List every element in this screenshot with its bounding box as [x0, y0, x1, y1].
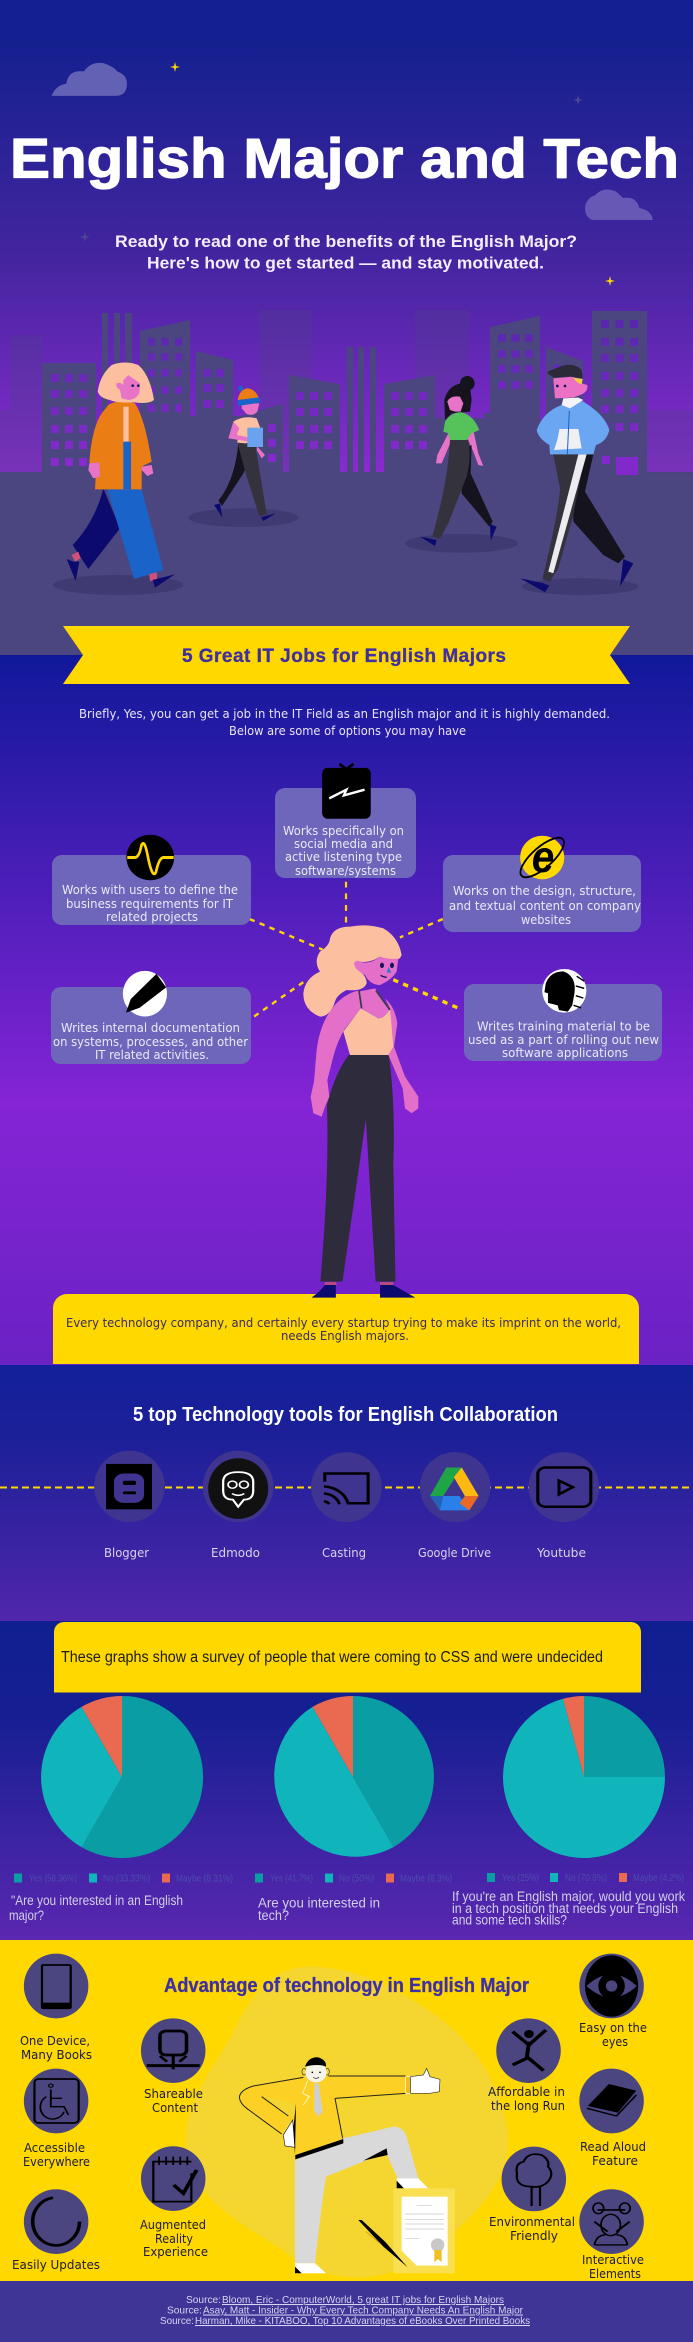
callout: English majors needed: needs English majors. [281, 1328, 409, 1343]
caption 3: in a tech position that needs your English [452, 1901, 678, 1916]
job card: documentation: IT related activities. [95, 1048, 209, 1062]
icon: tablet [24, 1954, 88, 2018]
icon: pulse [126, 835, 174, 880]
pie chart 1 [41, 1696, 203, 1858]
caption 1 [9, 1893, 183, 1923]
job card: business requirements: business requirements for IT [66, 897, 234, 911]
job card: social media [275, 788, 416, 878]
intro text [79, 707, 610, 738]
subtitle: Here's how to get started — and stay motivated. [147, 254, 544, 272]
legend 3: Yes (25%) [502, 1873, 539, 1884]
icon: tree [502, 2147, 566, 2211]
illustration: woman upper body [303, 925, 418, 1117]
icon: notepad [141, 2146, 205, 2211]
caption 1: major? [9, 1908, 44, 1923]
caption 1: "Are you interested in an English [11, 1893, 183, 1908]
banner: 5 great IT jobs: 5 Great IT Jobs for English Majors [182, 646, 506, 667]
job card: training material: Writes training material to be [477, 1020, 650, 1034]
legend 2: Yes (41.7%) [270, 1874, 313, 1884]
caption 2: tech? [258, 1908, 289, 1923]
cloud right [585, 190, 653, 220]
advantage labels [12, 2021, 647, 2281]
job card: documentation: on systems, processes, and other [53, 1035, 248, 1049]
illustration: shoes over callout [312, 1285, 415, 1298]
illustration: pen [358, 2220, 408, 2267]
illustration: woman trousers [320, 1055, 396, 1286]
panel: advantages of technology [0, 1940, 693, 2281]
job card: training material [464, 984, 662, 1061]
icon: update ring [24, 2189, 88, 2254]
caption 3: and some tech skills? [452, 1913, 567, 1928]
footer: sources: Source: [167, 2304, 202, 2316]
advantage labels: Experience [143, 2245, 208, 2259]
stars [80, 62, 615, 286]
footer: sources: Asay, Matt - Insider - Why Every Tech Company Needs An English Major [203, 2304, 523, 2316]
job card: social media: Works specifically on [283, 824, 404, 838]
icon: speaking head [542, 969, 586, 1013]
icon: pencil [123, 971, 167, 1016]
tool icon: casting [311, 1452, 382, 1522]
callout: survey intro: These graphs show a survey of people that were coming to CSS and were undecided [61, 1649, 603, 1666]
intro text: Briefly, Yes, you can get a job in the IT Field as an English major and it is highly demanded. [79, 707, 610, 721]
advantage labels: Everywhere [23, 2155, 90, 2169]
icon: interactive people [579, 2189, 644, 2254]
icon: eye [579, 1954, 644, 2018]
illustration: man with thumbs up [239, 2057, 440, 2273]
job card: business requirements: Works with users to define the [62, 883, 238, 897]
tool icon: youtube [529, 1452, 599, 1522]
icon: book [579, 2069, 644, 2133]
heading: Advantage of technology in English Major [164, 1975, 529, 1997]
title: English Major and Tech [10, 126, 679, 190]
job card: business requirements: related projects [106, 910, 198, 924]
advantage labels: the long Run [491, 2099, 565, 2113]
advantage labels: Environmental [489, 2215, 575, 2229]
panel: survey graphs [0, 1621, 693, 1941]
advantage labels: Shareable [144, 2087, 203, 2101]
advantage labels: Content [152, 2101, 198, 2115]
tool icon: edmodo [203, 1451, 274, 1522]
advantage labels: Easily Updates [12, 2258, 100, 2272]
person: woman in orange coat [53, 362, 183, 595]
legend 1 [14, 1874, 233, 1884]
tool labels: Youtube [536, 1546, 586, 1560]
job card: website content: websites [521, 913, 571, 927]
advantage labels: Augmented [140, 2218, 206, 2232]
caption 3 [452, 1889, 685, 1928]
cloud left [52, 63, 127, 96]
job card: social media: social media and [294, 837, 393, 851]
pie chart 3 [503, 1696, 665, 1858]
footer: sources: Harman, Mike - KITABOO, Top 10 Advantages of eBooks Over Printed Books [195, 2315, 530, 2327]
intro text: Below are some of options you may have [229, 724, 466, 738]
advantage labels: Elements [589, 2267, 641, 2281]
callout: English majors needed: Every technology company, and certainly every startup trying to make its imprint on the world, [66, 1315, 621, 1330]
icon: network [141, 2018, 205, 2083]
tool labels: Casting [322, 1546, 366, 1560]
pie chart 2 [274, 1696, 434, 1857]
footer: sources: Source: [186, 2294, 221, 2306]
advantage labels: Affordable in [488, 2085, 565, 2099]
legend 1: Maybe (8.31%) [176, 1874, 233, 1884]
illustration: certificate [393, 2188, 455, 2273]
job card: business requirements [52, 855, 251, 925]
job card: social media: software/systems [295, 864, 396, 878]
subtitle: Ready to read one of the benefits of the English Major? [115, 233, 577, 251]
advantage labels: One Device, [20, 2034, 90, 2048]
icon: internet explorer [515, 831, 569, 884]
panel: technology tools [0, 1365, 693, 1621]
job card: website content [443, 855, 641, 932]
icon: jumping person [496, 2018, 561, 2083]
legend 3 [487, 1873, 684, 1884]
advantage labels: Easy on the [579, 2021, 647, 2035]
panel: IT jobs section [0, 655, 693, 1365]
banner: 5 great IT jobs [63, 626, 630, 684]
caption 2: Are you interested in [258, 1896, 380, 1910]
legend 2 [255, 1874, 452, 1884]
callout: survey intro [54, 1622, 641, 1692]
blob background [186, 1967, 508, 2277]
advantage labels: Reality [155, 2232, 193, 2246]
legend 2: No (50%) [339, 1874, 374, 1884]
job card: training material: software applications [502, 1046, 628, 1060]
heading: 5 top Technology tools for English Collaboration [133, 1404, 558, 1426]
job card: website content: and textual content on company [449, 899, 641, 913]
icon: internet explorer: e [532, 832, 554, 882]
legend 2: Maybe (8.3%) [400, 1874, 452, 1884]
cityscape [0, 310, 693, 475]
panel: hero [0, 0, 693, 656]
person: child with beanie [188, 386, 298, 527]
icon: tv [322, 764, 371, 819]
tool labels: Edmodo [211, 1546, 260, 1560]
tool labels [104, 1546, 586, 1560]
legend 3: No (70.8%) [565, 1873, 607, 1884]
job card: documentation: Writes internal documentation [61, 1021, 240, 1035]
person: man in blue jacket [520, 365, 638, 595]
caption 2 [258, 1896, 380, 1923]
icon: accessibility [24, 2069, 88, 2133]
footer: sources [0, 2281, 693, 2342]
advantage labels: Interactive [582, 2253, 644, 2267]
callout: English majors needed [53, 1294, 639, 1364]
tool labels: Google Drive [418, 1546, 491, 1560]
job card: documentation [51, 987, 251, 1064]
tool icon: blogger [94, 1451, 165, 1522]
advantage labels: Many Books [21, 2048, 92, 2062]
advantage labels: eyes [602, 2035, 628, 2049]
job card: training material: used as a part of rolling out new [468, 1033, 659, 1047]
advantage labels: Read Aloud [580, 2140, 646, 2154]
legend 1: Yes (58.36%) [29, 1874, 77, 1884]
subtitle [115, 233, 577, 272]
tool icon: google drive [420, 1452, 491, 1522]
footer: sources: Bloom, Eric - ComputerWorld, 5 great IT jobs for English Majors [222, 2294, 504, 2306]
connector lines [250, 882, 460, 1016]
job card: social media: active listening type [285, 850, 402, 864]
advantage labels: Accessible [24, 2141, 85, 2155]
tool labels: Blogger [104, 1546, 149, 1560]
footer: sources: Source: [160, 2315, 194, 2327]
legend 1: No (33.33%) [103, 1874, 150, 1884]
advantage labels: Friendly [510, 2229, 558, 2243]
person: woman with bun [405, 376, 518, 553]
advantage labels: Feature [592, 2154, 638, 2168]
job card: website content: Works on the design, structure, [453, 884, 636, 898]
